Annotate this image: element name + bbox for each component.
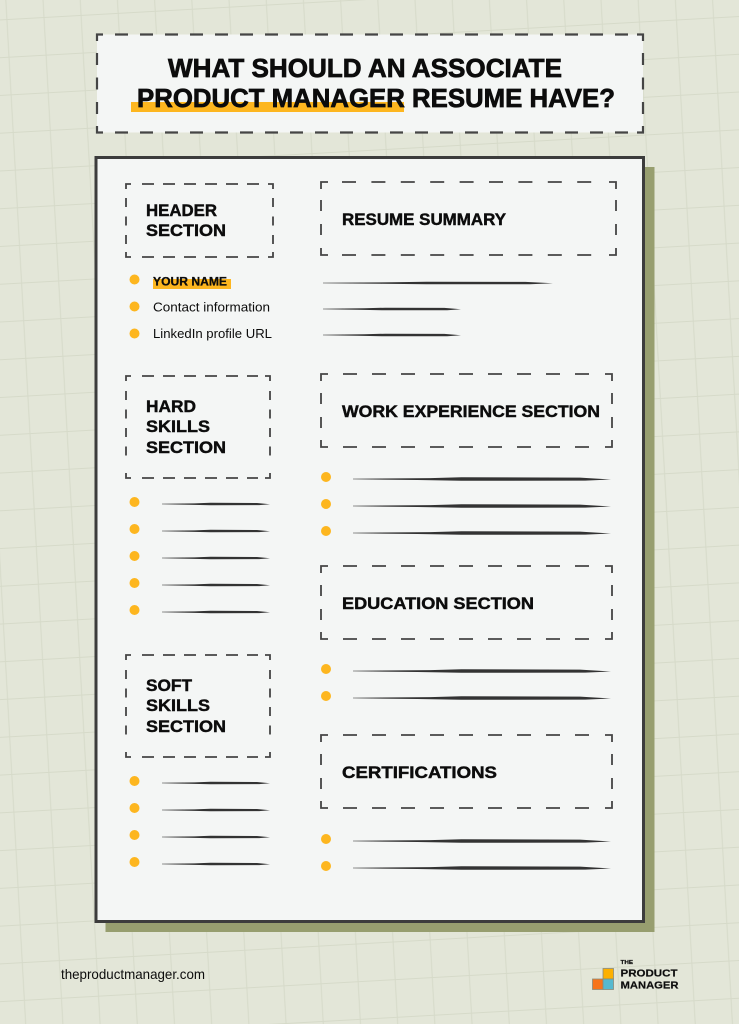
box: hard skills section: SKILLS	[146, 417, 210, 436]
logo wordmark	[620, 960, 679, 992]
contact list: Contact information	[153, 300, 270, 314]
logo wordmark: MANAGER	[620, 980, 679, 992]
contact list: LinkedIn profile URL	[153, 327, 272, 341]
box: header section: HEADER	[146, 201, 217, 220]
box: header section: SECTION	[146, 221, 226, 240]
box: soft skills section: SOFT	[146, 676, 193, 695]
hard skills list	[130, 497, 270, 615]
work experience list	[321, 472, 611, 536]
logo wordmark: THE	[620, 960, 633, 966]
website url: theproductmanager.com	[61, 966, 205, 982]
box: work experience section: WORK EXPERIENCE SECTION	[342, 402, 600, 421]
contact list	[130, 274, 272, 341]
box: certifications	[321, 735, 612, 808]
box: hard skills section: SECTION	[146, 438, 226, 457]
box: certifications: CERTIFICATIONS	[342, 763, 497, 782]
box: soft skills section: SKILLS	[146, 696, 210, 715]
education list	[321, 664, 611, 701]
box: resume summary	[321, 182, 616, 255]
title text	[137, 55, 615, 113]
contact list: YOUR NAME	[153, 274, 227, 288]
panel: resume page	[96, 158, 644, 922]
title text: WHAT SHOULD AN ASSOCIATE	[168, 55, 562, 83]
box: education section: EDUCATION SECTION	[342, 594, 534, 613]
box: education section	[321, 566, 612, 639]
logo wordmark: PRODUCT	[620, 968, 678, 980]
soft skills list	[130, 776, 270, 867]
box: soft skills section: SECTION	[146, 717, 226, 736]
title banner	[97, 34, 643, 132]
box: header section	[126, 184, 273, 257]
box: soft skills section	[126, 655, 270, 757]
box: hard skills section: HARD	[146, 397, 196, 416]
title highlight	[131, 102, 404, 112]
certifications list	[321, 834, 611, 871]
box: hard skills section	[126, 376, 270, 478]
card shadow	[106, 167, 654, 932]
logo	[592, 960, 679, 992]
box: resume summary: RESUME SUMMARY	[342, 210, 507, 229]
summary lines	[323, 282, 553, 336]
icon: logo squares	[592, 968, 614, 990]
box: work experience section	[321, 374, 612, 447]
title text: PRODUCT MANAGER RESUME HAVE?	[137, 85, 615, 113]
